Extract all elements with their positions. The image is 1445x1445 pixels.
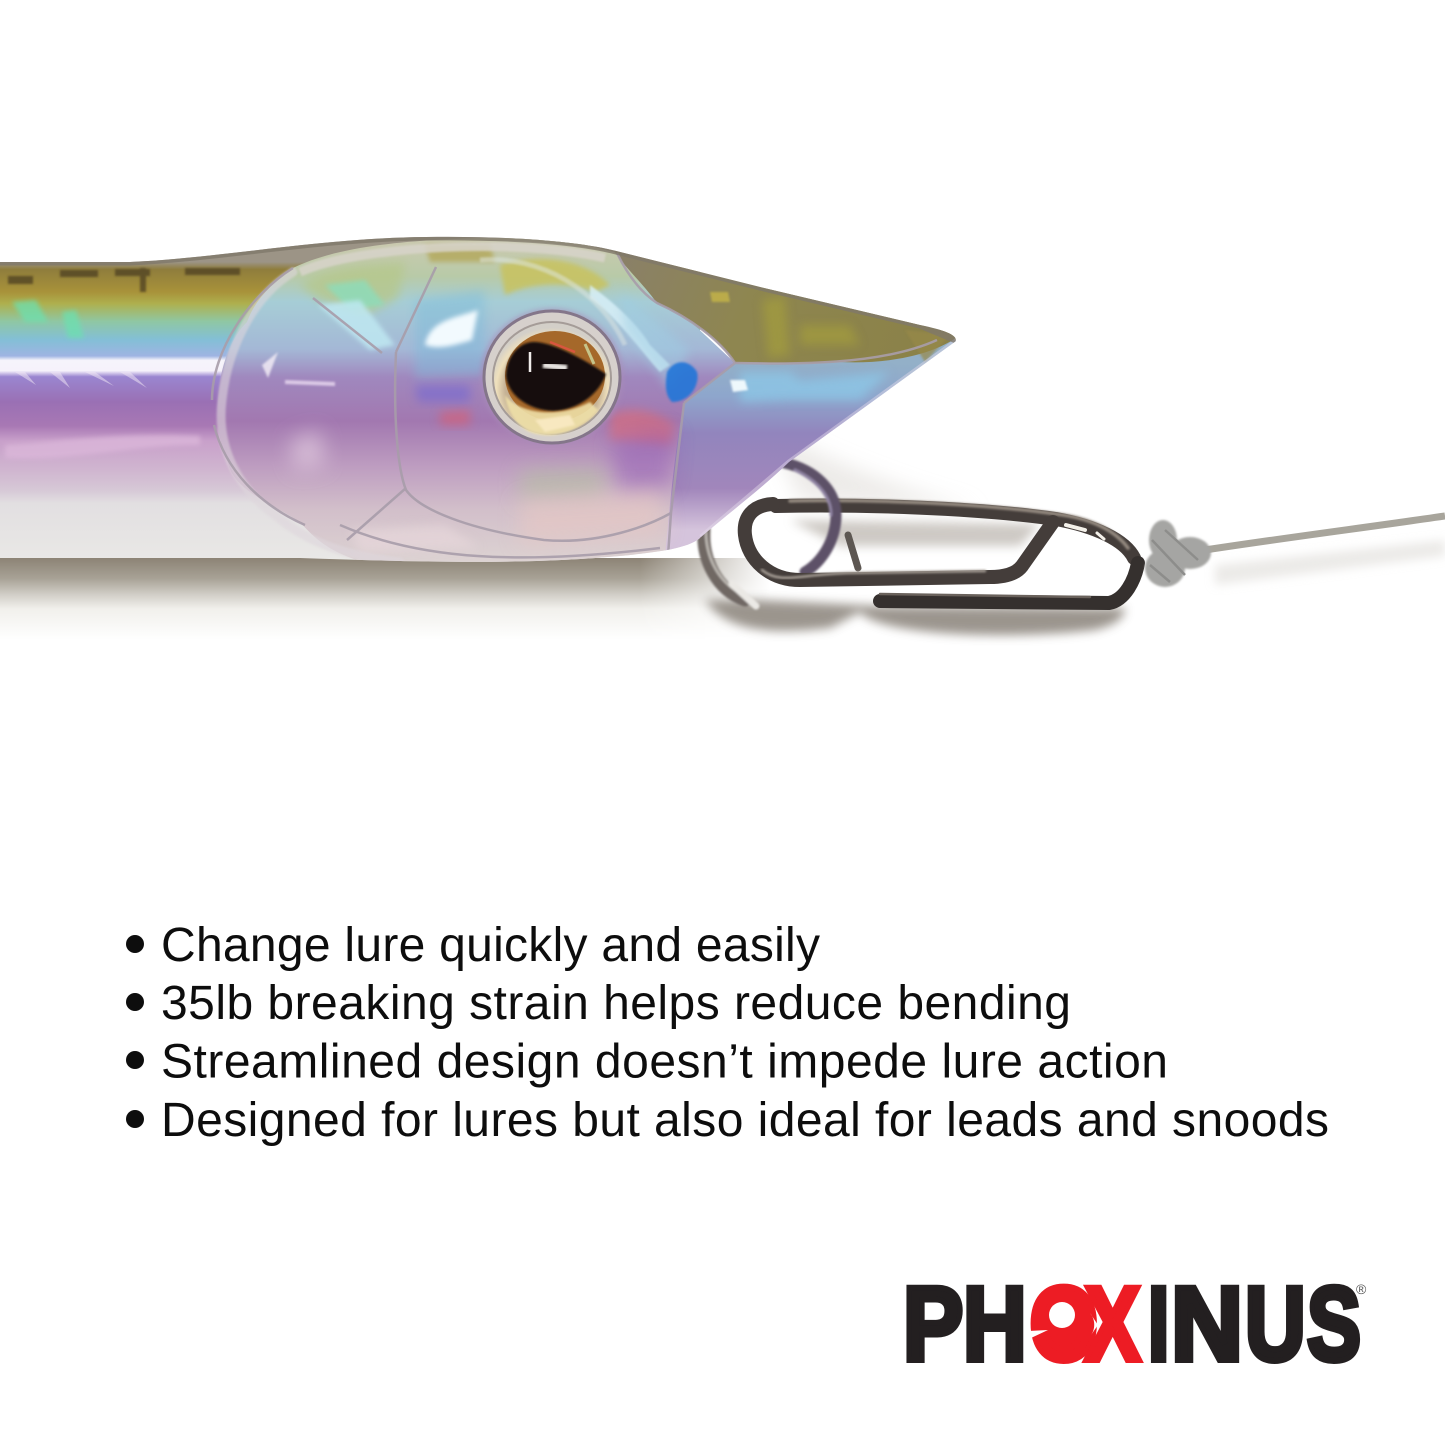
lure body band: [0, 230, 700, 570]
lure body highlight: [5, 435, 200, 459]
photo: lure: [0, 230, 960, 570]
top rim and yellow patch: [500, 259, 610, 295]
logo letters P H I N U S: U: [1245, 1266, 1306, 1383]
scale lines: [221, 272, 400, 562]
snout upper olive: [612, 248, 960, 363]
gill plate: [218, 238, 735, 570]
logo letters P H I N U S: N: [1171, 1265, 1243, 1383]
bullet list: [126, 919, 1329, 1147]
snout lower: [665, 335, 960, 555]
logo letters P H I N U S: H: [963, 1265, 1027, 1383]
bullet 2: 35lb breaking strain helps reduce bending: [161, 977, 1071, 1030]
photo: split ring: [704, 463, 836, 606]
bullet 1: Change lure quickly and easily: [161, 919, 820, 972]
product infographic canvas: [0, 236, 1445, 1364]
eye socket: [481, 306, 622, 422]
photo: shadow beneath lure: [0, 430, 1445, 640]
eye: [484, 311, 620, 443]
logo fish mark O X: O: [1030, 1265, 1098, 1383]
blue reflection: [666, 362, 698, 402]
bullet 3: Streamlined design doesn’t impede lure action: [161, 1036, 1168, 1088]
logo letters P H I N U S: I: [1148, 1266, 1169, 1383]
logo letters P H I N U S: P: [903, 1265, 963, 1383]
logo letters P H I N U S: S: [1307, 1265, 1361, 1382]
bullet 4: Designed for lures but also ideal for leads and snoods: [161, 1094, 1329, 1147]
head reflections: [318, 300, 395, 350]
logo registered mark: ®: [1356, 1281, 1367, 1297]
logo letters P H I N U S: [903, 1265, 1361, 1383]
logo fish mark O X: X: [1085, 1266, 1140, 1383]
photo: snap clip upper bar: [776, 501, 1134, 568]
photo: snap clip lower arm and loop: [745, 504, 1138, 603]
logo: Phoxinus: [903, 1265, 1367, 1383]
photo: knot and braided line: [1145, 516, 1445, 587]
logo fish mark O X: [1028, 1265, 1140, 1383]
